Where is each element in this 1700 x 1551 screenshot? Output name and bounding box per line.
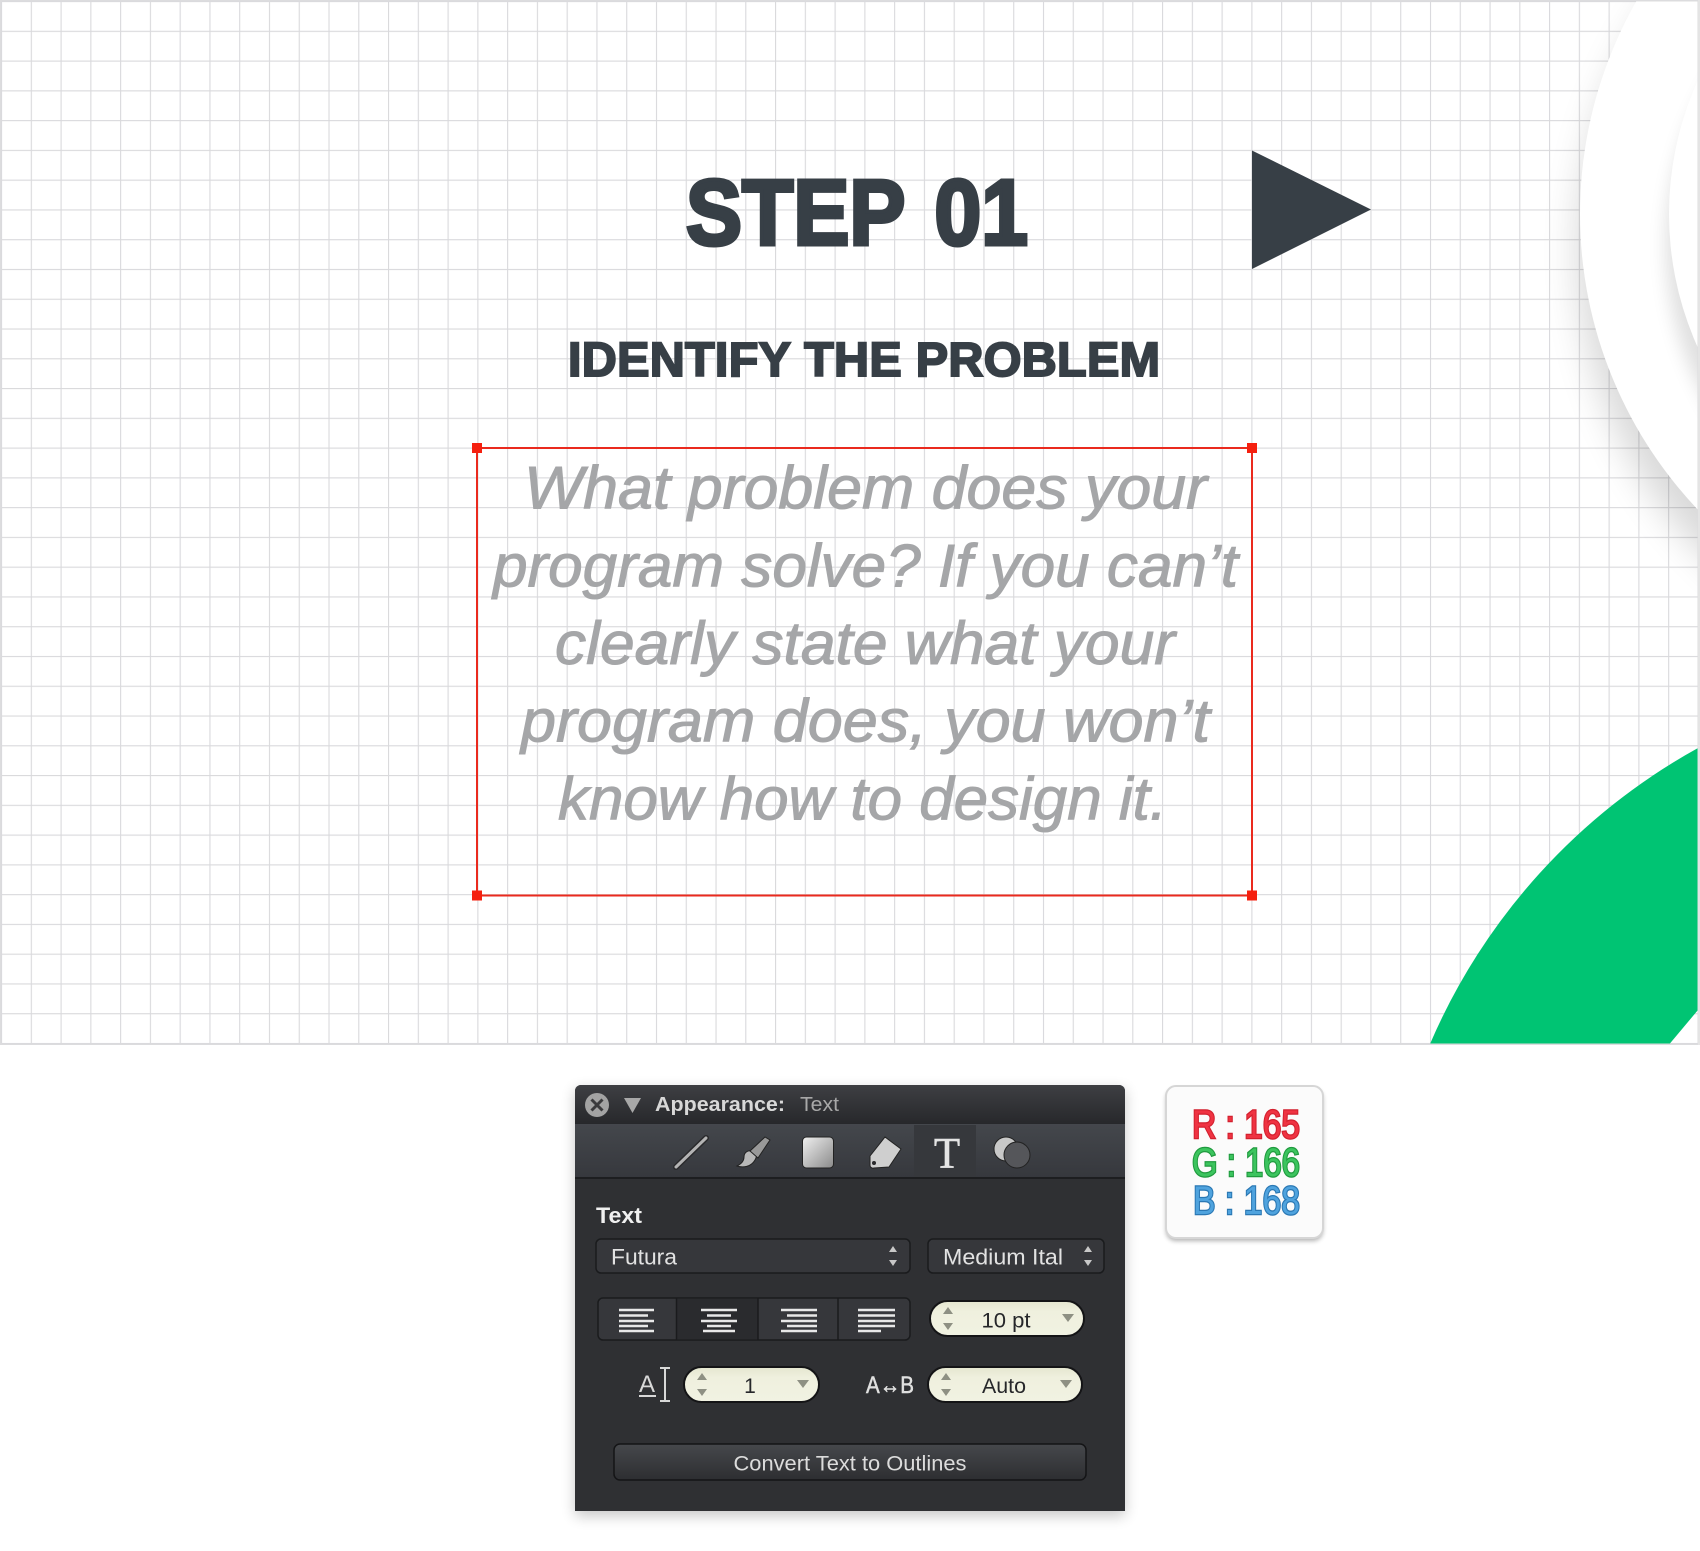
- panel: appearance palette: [575, 1085, 1125, 1516]
- icon: align right: [781, 1310, 817, 1331]
- stepper: leading: [684, 1367, 819, 1402]
- button: convert to outlines: [614, 1444, 1086, 1480]
- icon: close button: [585, 1093, 609, 1117]
- shape: white circles with shadows: [1577, 0, 1700, 680]
- dropdown: font style: Medium Ital: [943, 1244, 1063, 1270]
- stepper: leading: 1: [744, 1375, 756, 1398]
- dropdown: font family: Futura: [611, 1244, 678, 1270]
- stepper: tracking: [928, 1367, 1082, 1402]
- badge: RGB values: [1166, 1086, 1323, 1241]
- palette title: Text: [800, 1094, 839, 1116]
- label: tracking: A↔B: [866, 1372, 914, 1399]
- button: convert to outlines: Convert Text to Outlines: [734, 1452, 966, 1476]
- stepper: font size: [930, 1301, 1084, 1336]
- title bar: [575, 1085, 1125, 1124]
- body text: program solve? If you can’t: [491, 532, 1240, 600]
- shape: green ring segment: [1430, 748, 1698, 1044]
- arrow: play triangle: [1252, 150, 1371, 269]
- icon: fill square: [802, 1137, 834, 1168]
- alignment buttons: [598, 1298, 910, 1340]
- stepper: font size: 10 pt: [982, 1310, 1031, 1332]
- badge: RGB values: G : 166: [1192, 1141, 1300, 1185]
- icon: align center: [701, 1310, 737, 1331]
- badge: RGB values: R : 165: [1192, 1103, 1300, 1147]
- badge: RGB values: B : 168: [1193, 1179, 1300, 1223]
- palette title: Appearance:: [655, 1094, 785, 1116]
- icon: collapse triangle: [624, 1098, 641, 1113]
- body text: clearly state what your: [555, 610, 1177, 677]
- toolbar: [575, 1124, 1125, 1179]
- icon: brush: [737, 1137, 770, 1167]
- icon: justify: [858, 1310, 895, 1331]
- body text: know how to design it.: [558, 766, 1167, 832]
- panel: artboard with grid: [0, 0, 1700, 1045]
- title: STEP 01: [686, 160, 1028, 264]
- icon: leading: A: [639, 1371, 655, 1398]
- subtitle: IDENTIFY THE PROBLEM: [568, 333, 1160, 387]
- icon: T tool: T: [934, 1130, 960, 1178]
- icon: opacity circles: [994, 1137, 1030, 1168]
- icon: line: [676, 1138, 706, 1167]
- text box: selection outline: [472, 443, 1257, 900]
- dropdown: font family: [596, 1239, 910, 1273]
- stepper: tracking: Auto: [982, 1375, 1026, 1398]
- body text: [491, 454, 1240, 832]
- icon: tag: [870, 1137, 901, 1168]
- icon: leading: [639, 1368, 670, 1401]
- body text: What problem does your: [524, 454, 1209, 522]
- icon: align left: [619, 1310, 654, 1331]
- body text: program does, you won’t: [519, 688, 1212, 754]
- palette title: [655, 1094, 839, 1116]
- dropdown: font style: [928, 1239, 1104, 1273]
- section label: Text: [596, 1203, 643, 1228]
